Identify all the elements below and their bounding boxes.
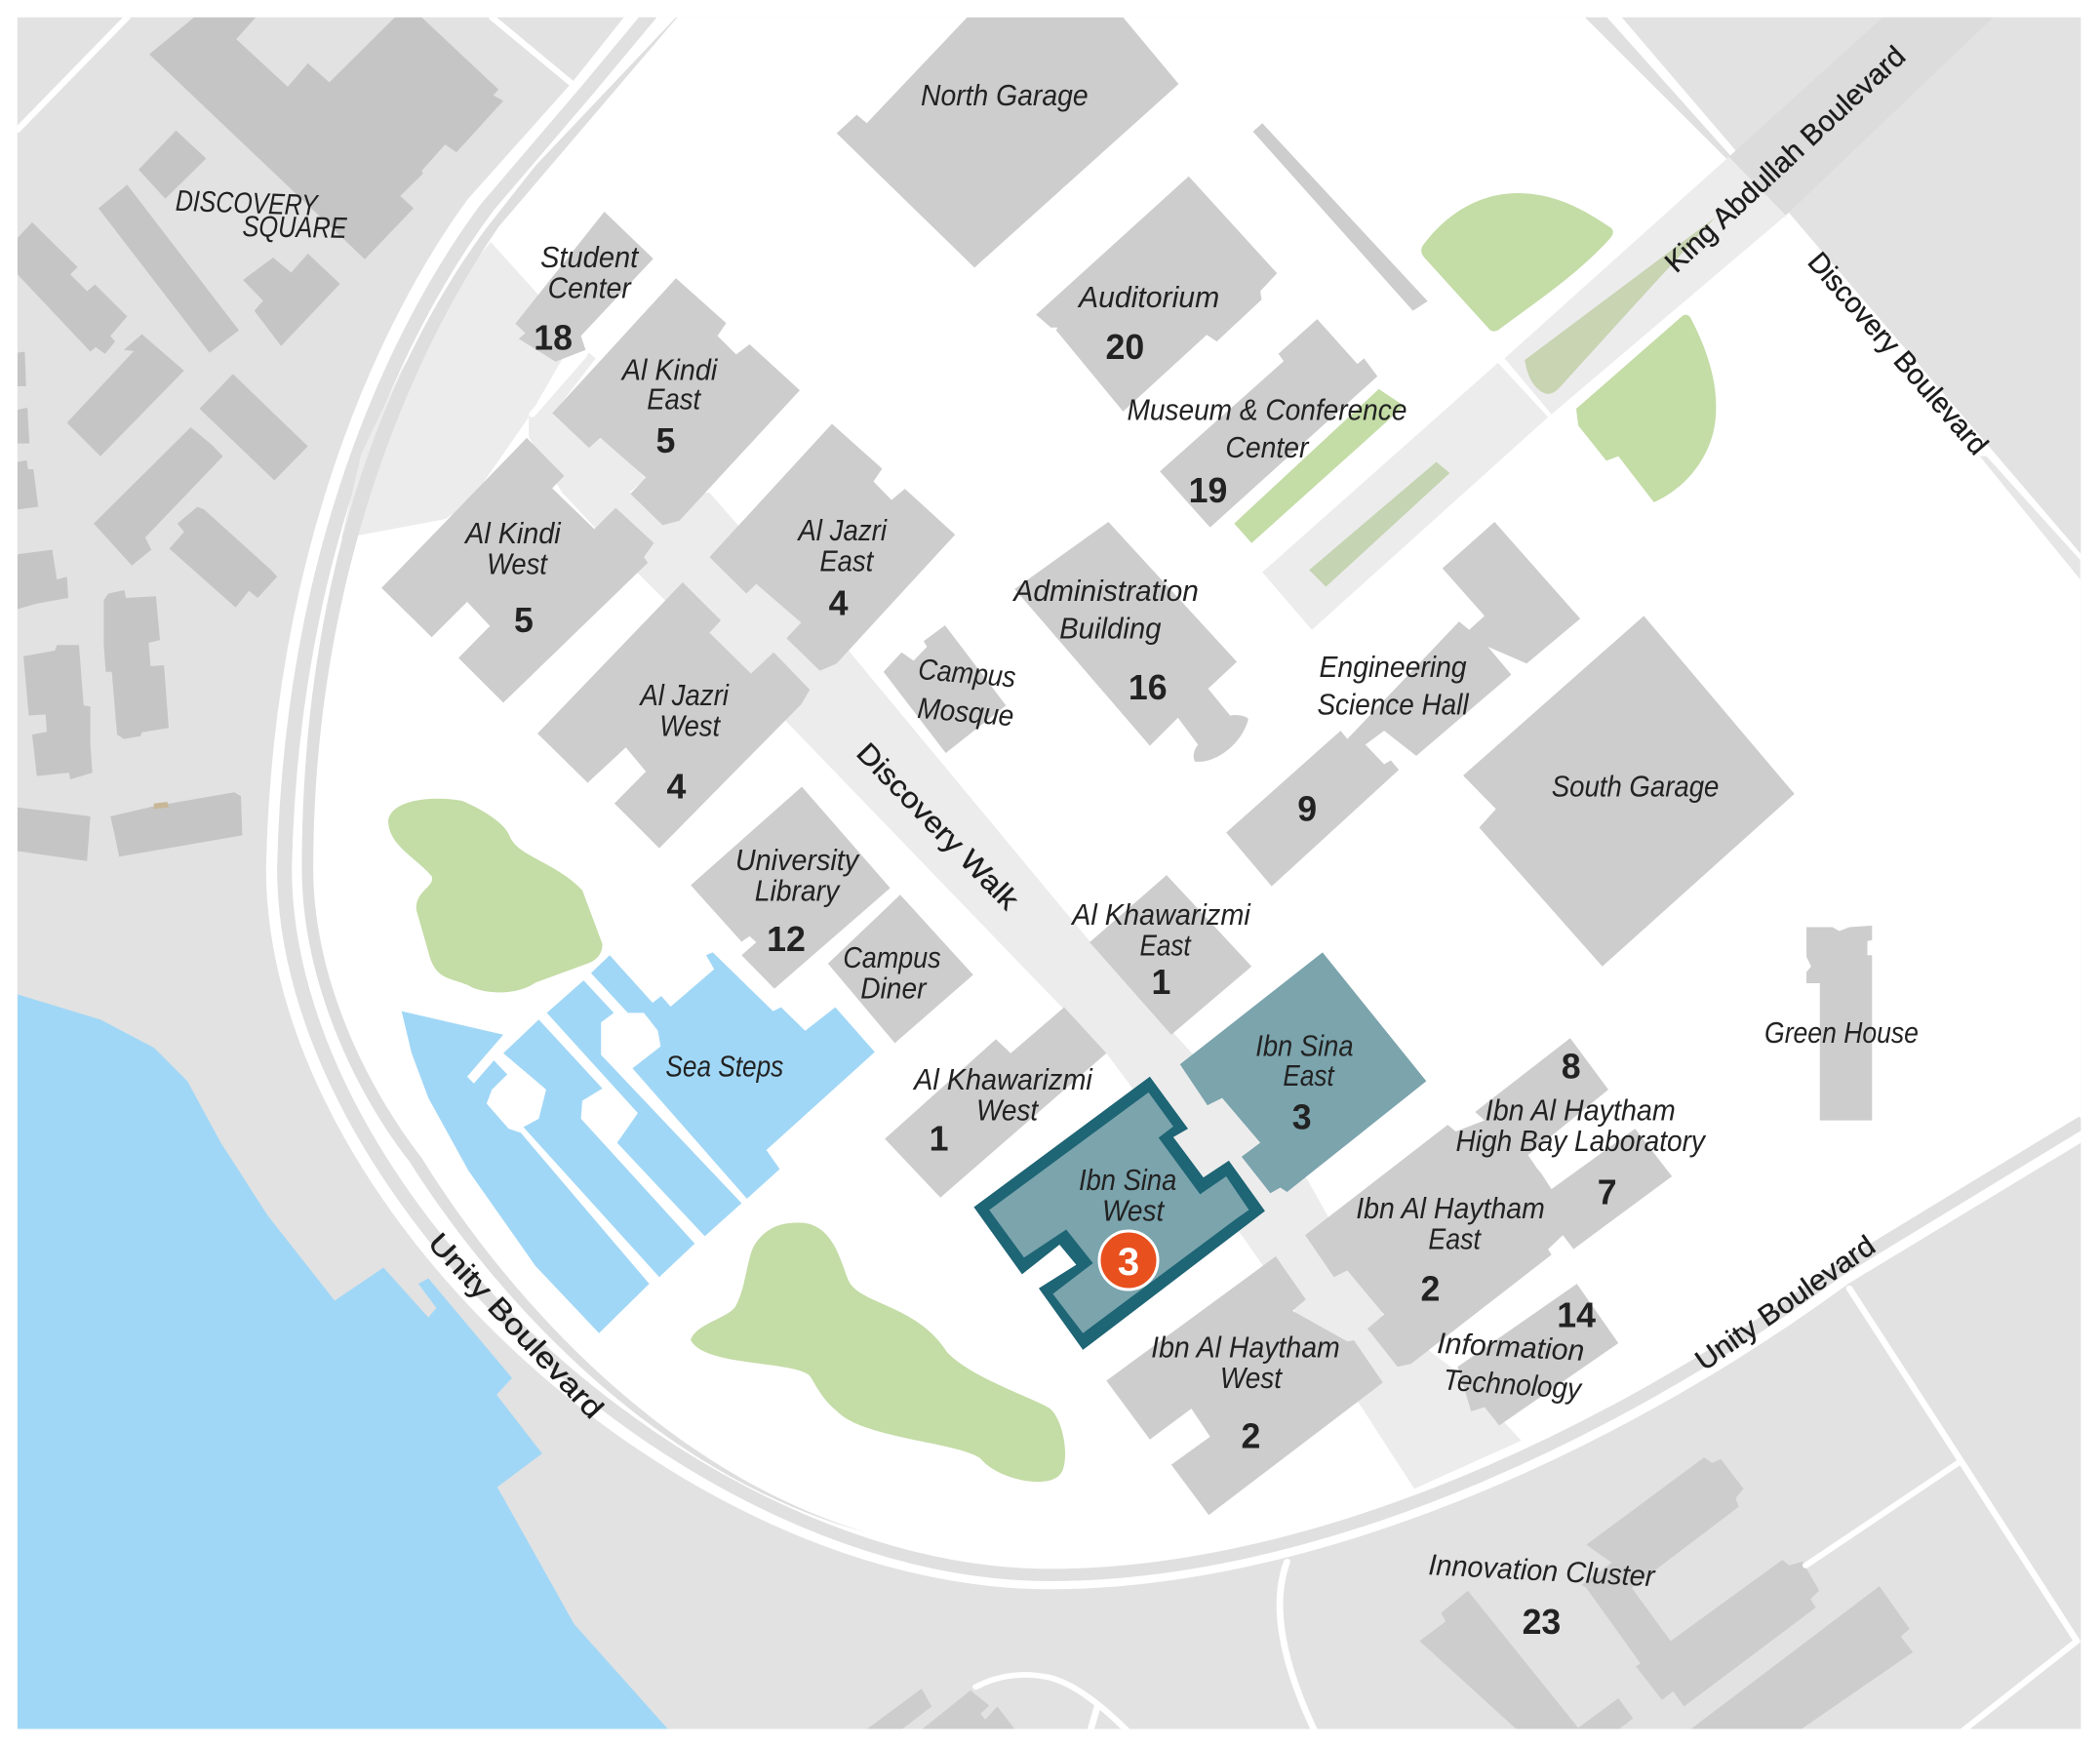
building names: Student [540,242,640,274]
Discovery Walk [636,493,1522,1489]
green park north [1421,193,1613,332]
Ibn Sina West, highlighted [973,1077,1265,1350]
building names: Al Kindi [463,518,562,550]
buildings: north and east campus [837,18,1795,967]
road names [421,40,1995,1425]
building names: East [1428,1223,1482,1255]
building names: Ibn Al Haytham [1356,1193,1545,1225]
service roads on land [975,1289,2077,1733]
building names: Engineering [1320,652,1467,684]
building names: West [1220,1363,1284,1395]
building numbers: 4 [829,583,849,622]
Innovation Cluster buildings [1419,1457,1913,1730]
building names: Center [1225,432,1310,464]
building names: High Bay Laboratory [1456,1126,1707,1158]
building numbers: 2 [1421,1269,1440,1308]
road names: Unity Boulevard [421,1227,610,1425]
building names: West [659,711,722,743]
buildings at bottom edge [865,1688,1016,1730]
building names: Ibn Sina [1255,1031,1354,1063]
building names: Sea Steps [665,1051,783,1083]
building numbers: 7 [1598,1172,1617,1211]
buildings: south campus [1090,875,1872,1515]
building names: Campus [843,942,941,974]
building names: East [1283,1060,1335,1092]
road names: Discovery Walk [850,736,1025,916]
thin wedge beside Discovery Boulevard [1585,18,1789,221]
road names: Discovery Boulevard [1802,246,1995,461]
building names: Ibn Al Haytham [1486,1095,1676,1128]
building names: Innovation Cluster [1428,1549,1657,1593]
road: Unity Boulevard band [285,14,2083,1575]
building numbers: 18 [534,318,573,357]
building numbers: 20 [1106,328,1144,367]
Sea Steps water [402,952,875,1333]
building numbers: 16 [1129,668,1168,707]
campus ground [271,14,2083,1585]
building names: Campus [917,654,1017,695]
building names: Al Khawarizmi [1070,899,1251,932]
building numbers [514,318,1617,1642]
location marker: building 3 [1099,1231,1158,1290]
building names: University [735,845,860,877]
east plaza [1262,363,1548,630]
green park by Sea Steps [388,799,603,992]
water: sea [18,994,669,1730]
road: Unity Boulevard outer white line [271,14,2083,1585]
building names: Science Hall [1317,690,1470,722]
building names: Center [548,273,633,305]
road names: King Abdullah Boulevard [1659,40,1912,279]
building names: Mosque [916,693,1015,733]
median green [1525,218,1716,394]
building names: Museum & Conference [1127,394,1407,426]
walkway lines [18,18,583,415]
building numbers: 19 [1189,471,1227,510]
building numbers: 2 [1242,1416,1260,1455]
building names: East [819,546,875,578]
building names: DISCOVERY [175,185,319,222]
building names: East [1140,931,1192,963]
building names: West [487,548,548,580]
wedge south of Discovery Boulevard [1980,457,2080,579]
building numbers: 5 [656,421,675,460]
building names: Technology [1443,1365,1584,1406]
building names: Building [1059,613,1162,645]
plaza planting [1309,462,1449,587]
location marker: building 3: 3 [1118,1241,1139,1284]
Ibn Sina East, teal [1180,952,1426,1193]
building numbers: 12 [767,920,806,959]
building numbers: 4 [666,767,686,806]
road names: Unity Boulevard [1689,1229,1882,1377]
building names: Library [755,875,841,907]
buildings: west campus [381,212,1106,1198]
building numbers: 1 [1152,963,1170,1002]
plaza between Al Kindi buildings [529,353,709,560]
labels [175,40,1995,1642]
building numbers: 3 [1292,1098,1312,1137]
building names: South Garage [1552,771,1719,803]
building names: Administration [1011,576,1199,608]
building names: SQUARE [242,211,348,245]
building numbers: 5 [514,601,534,640]
building names [175,80,1919,1593]
building names: Green House [1764,1017,1919,1050]
building numbers: 23 [1523,1603,1561,1642]
green park south [691,1222,1065,1482]
plaza between Ibn Sina buildings [1176,1098,1260,1176]
building names: East [647,383,702,416]
building names: Diner [860,973,928,1006]
building names: West [1102,1196,1166,1228]
building names: Ibn Sina [1079,1165,1176,1197]
building names: Information [1437,1328,1585,1368]
building names: Al Kindi [620,354,719,386]
road: tapered inner stripe [301,18,868,1533]
building names: Al Khawarizmi [912,1064,1093,1096]
building numbers: 8 [1562,1047,1581,1086]
building numbers: 14 [1557,1296,1596,1335]
plaza west of Al Kindi [341,242,575,538]
building names: West [976,1095,1040,1128]
building numbers: 9 [1297,790,1317,829]
building names: Al Jazri [797,515,888,547]
building names: North Garage [921,80,1089,112]
building names: Ibn Al Haytham [1151,1332,1340,1365]
building names: Al Jazri [639,680,730,712]
green park east [1576,315,1716,502]
King Abdullah Boulevard, on land [1730,150,1789,216]
King Abdullah Boulevard, on campus [1505,157,1786,415]
building numbers: 1 [930,1119,948,1158]
building names: Auditorium [1077,282,1219,314]
green strip [1234,389,1405,543]
buildings: Discovery Square [18,18,503,861]
